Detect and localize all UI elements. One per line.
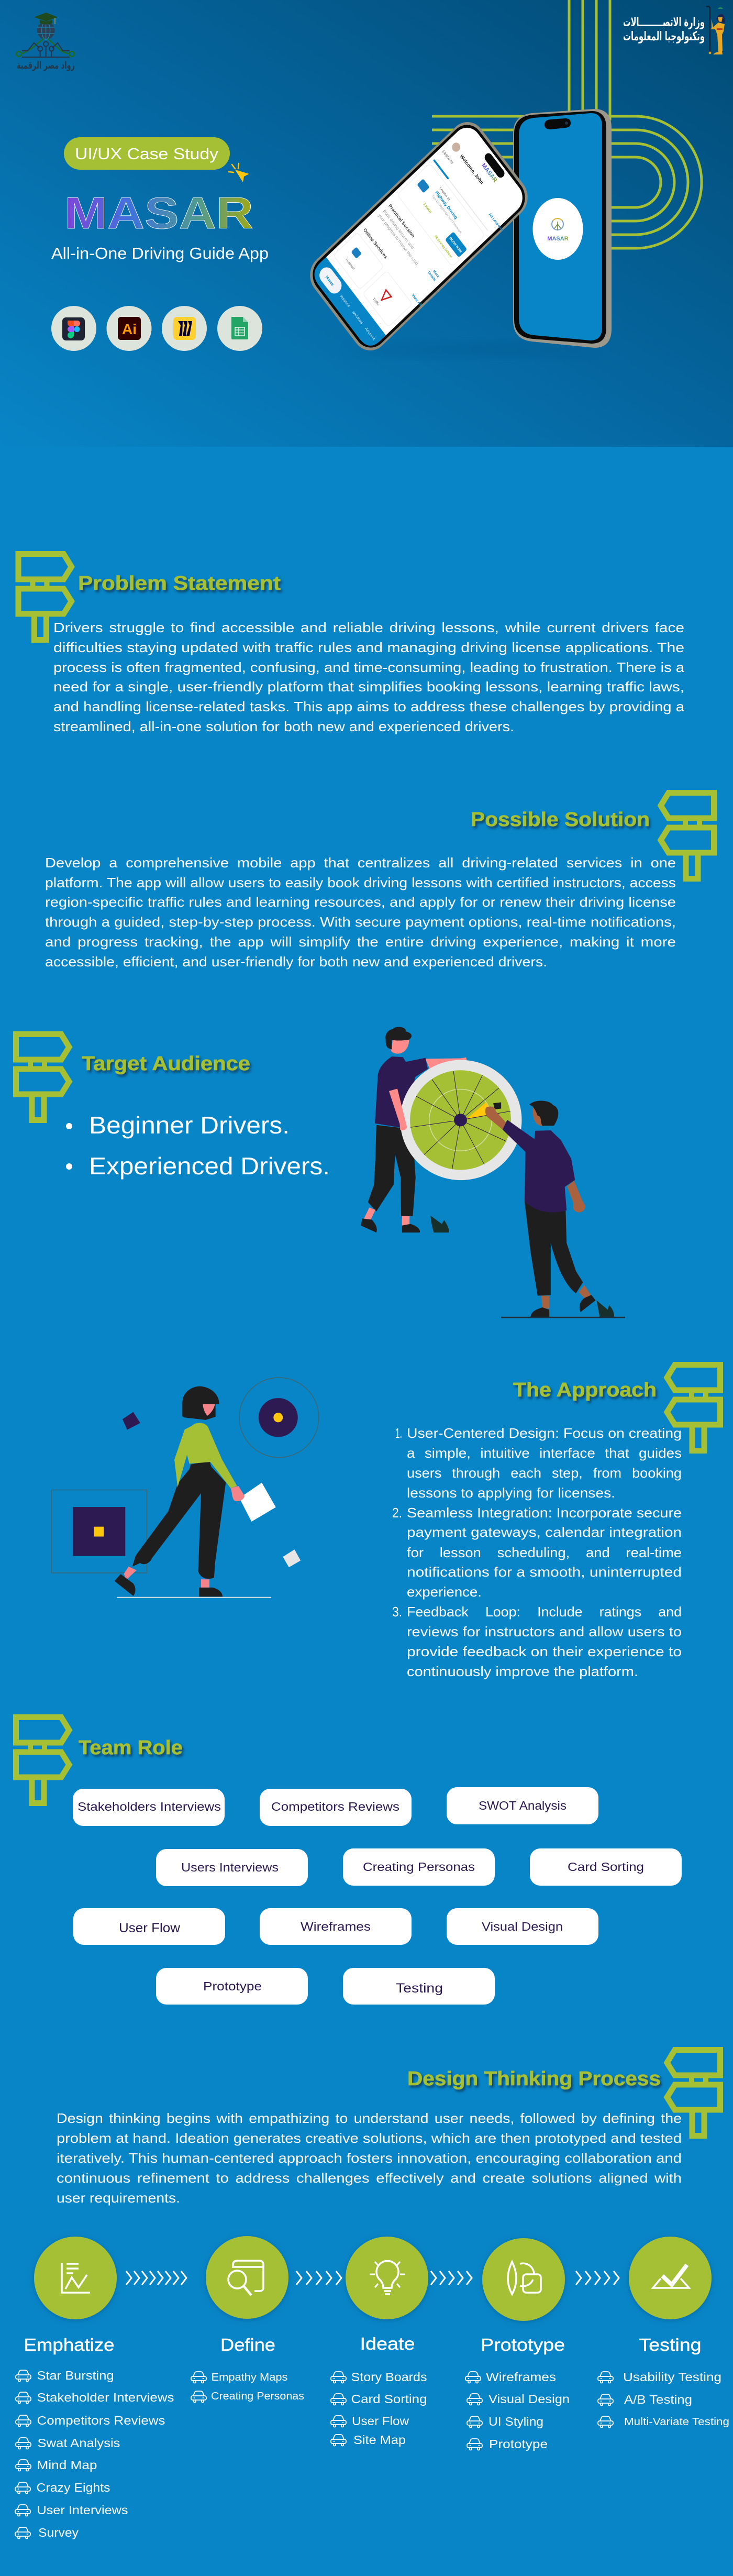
- icon: Figma: [51, 306, 96, 351]
- icon: Google Sheets: [217, 306, 262, 351]
- arrows: Emphatize to Define: [126, 2271, 186, 2285]
- paragraph: and handling license-related tasks. This app aims to address these challenges by providing a: [53, 699, 685, 714]
- list: Define methods: Creating Personas: [211, 2391, 304, 2402]
- numbered list: notifications for a smooth, uninterrupted: [407, 1564, 682, 1580]
- list: Testing methods: Usability Testing: [623, 2370, 721, 2384]
- arrows: Ideate to Prototype: [431, 2271, 472, 2285]
- icon: signpost: [16, 1717, 69, 1803]
- stage: Ideate: Ideate: [360, 2334, 415, 2353]
- list: Prototype methods: Prototype: [489, 2437, 548, 2451]
- list: Testing methods: [598, 2370, 729, 2428]
- button: User Flow: User Flow: [119, 1921, 181, 1935]
- tilted phone mockup: [303, 114, 535, 359]
- list: Ideate methods: Site Map: [353, 2433, 406, 2447]
- panel: the approach: [51, 1365, 720, 1679]
- list: Emphatize methods: Competitors Reviews: [37, 2414, 165, 2427]
- paragraph: need for a single, user-friendly platform that simplifies booking lessons, learning traffic laws,: [53, 679, 684, 695]
- lesson card: Lesson 11: [439, 186, 451, 202]
- button: Visual Design: [447, 1908, 598, 1945]
- paragraph: [53, 620, 685, 734]
- button: Users Interviews: Users Interviews: [181, 1861, 279, 1874]
- button: Card Sorting: Card Sorting: [568, 1860, 644, 1874]
- paragraph: iteratively. This human-centered approach fosters innovation, encouraging collaboration and: [57, 2150, 682, 2166]
- practical session text: Details: [427, 271, 437, 282]
- button: Card Sorting: [530, 1848, 682, 1886]
- badge: UI/UX Case Study: [64, 137, 230, 170]
- stage: Emphatize: Emphatize: [24, 2335, 114, 2354]
- lesson card: 88 Driving School: [434, 235, 453, 259]
- paragraph: and progress tracking, the app will simplify the entire driving experience, making it more: [45, 934, 676, 950]
- numbered list: lessons to applying for licenses.: [407, 1485, 615, 1501]
- app header: [433, 133, 523, 239]
- button: Competitors Reviews: Competitors Reviews: [271, 1800, 399, 1813]
- numbered list: 1.: [395, 1425, 402, 1441]
- practical session text: your progress to master the road.: [377, 213, 420, 267]
- app logo wordmark: MASAR: MASAR: [64, 189, 253, 238]
- list: Prototype methods: [465, 2370, 570, 2451]
- button: Prototype: [156, 1968, 308, 2005]
- list: Ideate methods: Story Boards: [351, 2370, 427, 2384]
- paragraph: [45, 855, 676, 970]
- lesson card: [397, 163, 485, 267]
- numbered list: payment gateways, calendar integration: [407, 1524, 682, 1540]
- bottom navigation: [309, 257, 386, 351]
- numbered list: 3.: [392, 1604, 402, 1620]
- list: Emphatize methods: Stakeholder Interviews: [37, 2391, 174, 2404]
- paragraph: through a guided, step-by-step process. With secure payment options, real-time notifications,: [45, 914, 676, 930]
- stage: Prototype: [481, 2238, 565, 2354]
- online services cards: [334, 225, 424, 333]
- list: Testing methods: Multi-Variate Testing: [624, 2416, 729, 2428]
- numbered list: User-Centered Design: Focus on creating: [407, 1425, 682, 1441]
- button: SWOT Analysis: SWOT Analysis: [479, 1799, 567, 1812]
- panel: team role: [16, 1717, 682, 2005]
- heading: The Approach: [513, 1379, 657, 1401]
- stage: Testing: [629, 2237, 712, 2354]
- online services cards: Traffic: [372, 297, 380, 306]
- app header: Lessons: [441, 149, 454, 165]
- bottom navigation: lessons: [339, 294, 351, 308]
- panel: target audience: [16, 1027, 625, 1318]
- lesson card: 1 Hour: [423, 202, 433, 214]
- illustration: woman walking with paper: [51, 1378, 319, 1598]
- lesson card: BOOK NOW: [449, 236, 462, 254]
- decorative green track lines: [432, 0, 702, 248]
- heading: Design Thinking Process: [407, 2068, 661, 2090]
- button: Testing: Testing: [396, 1981, 443, 1996]
- paragraph: difficulties staying updated with traffic rules and managing driving license applications. The: [53, 640, 684, 655]
- heading: Target Audience: [82, 1053, 250, 1075]
- panel: design thinking process: [15, 2050, 729, 2539]
- panel: problem statement: [18, 554, 685, 734]
- heading: Team Role: [79, 1737, 183, 1759]
- bottom navigation: Home: [325, 274, 335, 287]
- numbered list: users through each step, from booking: [407, 1465, 682, 1481]
- stage: Ideate: [346, 2237, 428, 2353]
- arrows: Prototype to Testing: [576, 2271, 619, 2285]
- arrows: Define to Ideate: [296, 2271, 341, 2285]
- list: Emphatize methods: Swat Analysis: [38, 2436, 120, 2450]
- list: Emphatize methods: Survey: [38, 2526, 79, 2539]
- paragraph: Develop a comprehensive mobile app that centralizes all driving-related services in one: [45, 855, 676, 871]
- lesson card: Highway Driving: [435, 190, 458, 220]
- heading: Problem Statement: [78, 573, 281, 595]
- list: Define methods: [191, 2372, 304, 2402]
- button: Creating Personas: Creating Personas: [363, 1860, 475, 1874]
- icon: cursor click: [229, 163, 249, 182]
- bottom navigation: services: [351, 310, 364, 325]
- button: User Flow: [73, 1908, 225, 1945]
- paragraph: continuous refinement to address challenges effectively and create solutions aligned with: [57, 2170, 682, 2186]
- logo: Digital Egypt Pioneers: [16, 13, 75, 71]
- icon: signpost mirrored: [667, 1365, 720, 1451]
- icon: signpost mirrored: [661, 793, 714, 879]
- list: Emphatize methods: User Interviews: [37, 2503, 128, 2517]
- badge: UI/UX Case Study: UI/UX Case Study: [75, 145, 219, 163]
- button: Stakeholders Interviews: Stakeholders Interviews: [77, 1800, 221, 1813]
- stage: Testing: Testing: [639, 2335, 702, 2354]
- front phone mockup: [513, 109, 612, 348]
- stage: Emphatize: [24, 2237, 117, 2354]
- panel: hero banner: [0, 0, 733, 447]
- app splash logo: MASAR: [547, 236, 569, 242]
- numbered list: experience.: [407, 1584, 482, 1600]
- numbered list: Feedback Loop: Include ratings and: [407, 1604, 682, 1620]
- bullet list: Beginner Drivers.: [89, 1111, 290, 1139]
- icon: Adobe Illustrator: Ai: [122, 321, 137, 337]
- button: Competitors Reviews: [260, 1789, 412, 1826]
- paragraph: streamlined, all-in-one solution for both new and experienced drivers.: [53, 719, 514, 734]
- button: Wireframes: Wireframes: [301, 1920, 371, 1933]
- bullet list: Experienced Drivers.: [89, 1152, 330, 1180]
- icon: Miro: [162, 306, 207, 351]
- list: Define methods: Empathy Maps: [212, 2372, 288, 2383]
- icon: signpost: [18, 554, 71, 640]
- paragraph: Drivers struggle to find accessible and reliable driving lessons, while current drivers face: [53, 620, 684, 635]
- button: Users Interviews: [156, 1849, 308, 1886]
- numbered list: for lesson scheduling, and real-time: [407, 1545, 682, 1560]
- paragraph: Design thinking begins with empathizing to understand user needs, followed by defining the: [57, 2110, 682, 2126]
- app header: All Lessons: [488, 212, 504, 232]
- list: Emphatize methods: [15, 2369, 174, 2539]
- ground shadow: [346, 346, 597, 354]
- logo: Ministry of Communications: [623, 6, 725, 54]
- numbered list: 2.: [392, 1505, 402, 1521]
- lesson card: Tips On Highways And Freeways: [431, 194, 462, 234]
- stage: Define: Define: [220, 2335, 275, 2354]
- numbered list: continuously improve the platform.: [407, 1664, 638, 1679]
- paragraph: [57, 2110, 682, 2206]
- heading: Possible Solution: [471, 809, 650, 831]
- bullet list: [66, 1111, 330, 1180]
- list: Testing methods: A/B Testing: [624, 2393, 692, 2406]
- icon: signpost: [16, 1034, 69, 1120]
- paragraph: accessible, efficient, and user-friendly for both new and experienced drivers.: [45, 954, 547, 970]
- illustration: two people spinning a wheel: [361, 1027, 625, 1318]
- button: Stakeholders Interviews: [73, 1789, 225, 1826]
- button: Creating Personas: [343, 1848, 495, 1886]
- hero gradient background: [0, 0, 733, 447]
- list: Ideate methods: [331, 2370, 427, 2447]
- practical session text: Practical Session: [387, 203, 416, 239]
- subtitle: All-in-One Driving Guide App: [51, 244, 269, 262]
- paragraph: problem at hand. Ideation generates creative solutions, which are then prototyped and tested: [57, 2130, 682, 2146]
- list: Prototype methods: UI Styling: [488, 2415, 543, 2428]
- button: Wireframes: [260, 1908, 412, 1945]
- online services cards: Online Services: [362, 227, 388, 260]
- list: Ideate methods: Card Sorting: [351, 2392, 427, 2406]
- numbered list: a simple, intuitive interface that guides: [407, 1445, 682, 1461]
- button: SWOT Analysis: [447, 1787, 598, 1824]
- list: Emphatize methods: Star Bursting: [37, 2369, 114, 2382]
- icon: Adobe Illustrator: [107, 306, 152, 351]
- practical session text: More: [432, 269, 440, 279]
- online services cards: Practical: [345, 258, 355, 271]
- paragraph: user requirements.: [57, 2190, 180, 2206]
- paragraph: region-specific traffic rules and learning resources, and apply for or renew their driving license: [45, 894, 676, 910]
- logo: Digital Egypt Pioneers: رواد مصر الرقمية: [17, 60, 75, 71]
- numbered list: provide feedback on their experience to: [407, 1644, 682, 1659]
- button: Visual Design: Visual Design: [482, 1920, 563, 1933]
- online services cards: View All: [411, 293, 423, 307]
- paragraph: platform. The app will allow users to easily book driving lessons with certified instructors, access: [45, 875, 676, 890]
- list: Prototype methods: Visual Design: [488, 2392, 570, 2406]
- practical session text: [377, 203, 445, 285]
- stage: Define: [206, 2236, 288, 2354]
- app splash logo: [533, 198, 583, 260]
- app header: MASAR: [480, 162, 498, 184]
- numbered list: [392, 1425, 682, 1679]
- panel: possible solution: [45, 793, 714, 970]
- app header: Welcome, John: [459, 153, 484, 185]
- practical session text: Book driving lessons and: [382, 208, 415, 250]
- stage: Prototype: Prototype: [481, 2335, 565, 2354]
- button: Testing: [343, 1968, 495, 2005]
- numbered list: reviews for instructors and allow users to: [407, 1624, 682, 1639]
- list: Ideate methods: User Flow: [352, 2414, 409, 2428]
- paragraph: process is often fragmented, confusing, and time-consuming, leading to frustration. There is a: [53, 659, 685, 675]
- list: Emphatize methods: Mind Map: [37, 2458, 97, 2472]
- button: Prototype: Prototype: [203, 1979, 262, 1993]
- numbered list: Seamless Integration: Incorporate secure: [407, 1505, 682, 1521]
- list: Emphatize methods: Crazy Eights: [37, 2481, 110, 2494]
- list: Prototype methods: Wireframes: [486, 2370, 556, 2384]
- icon: signpost mirrored: [667, 2050, 720, 2136]
- bottom navigation: Account: [364, 326, 376, 342]
